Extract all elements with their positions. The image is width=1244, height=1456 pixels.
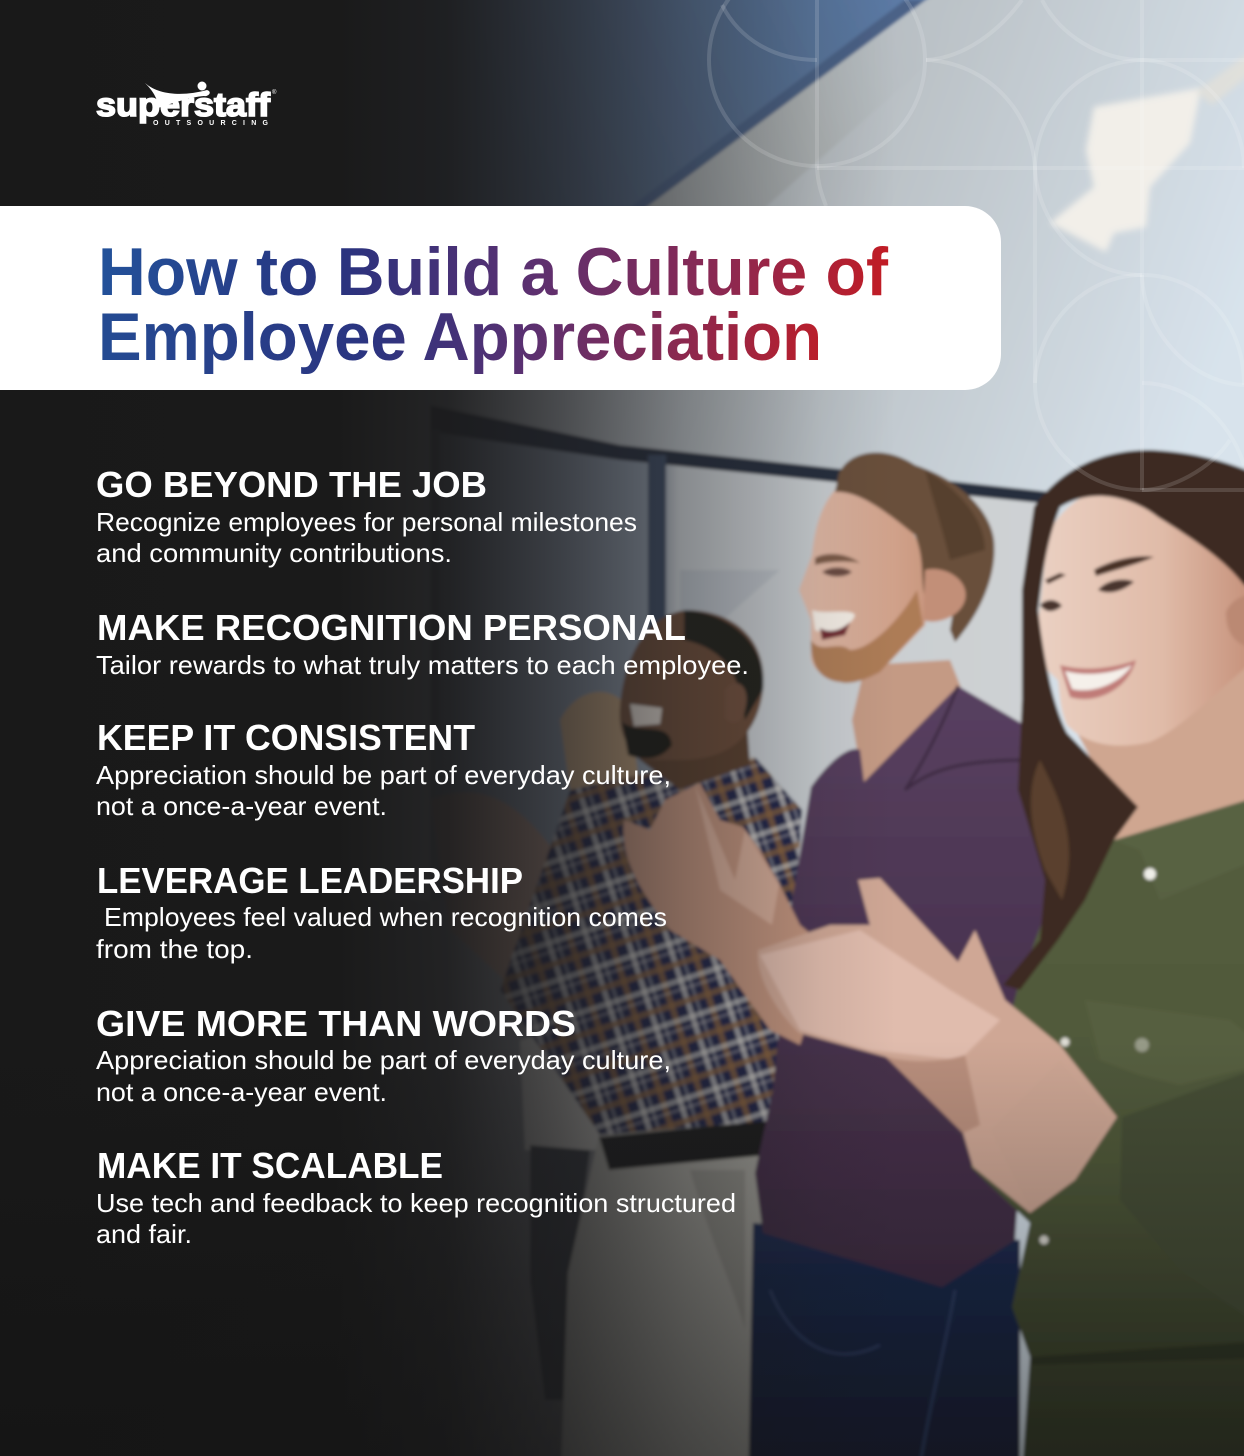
description: Recognize employees for personal milestones (96, 507, 637, 537)
tip: make it scalable (96, 1145, 736, 1249)
colleague in plaid shirt (500, 610, 802, 1456)
heading: KEEP IT CONSISTENT (97, 717, 475, 758)
tip: keep it consistent (96, 717, 671, 821)
tip: leverage leadership (96, 860, 667, 964)
man's clapping hands (623, 783, 830, 1045)
description: Appreciation should be part of everyday culture, (96, 1045, 671, 1075)
description: Employees feel valued when recognition comes (104, 902, 667, 932)
description: Appreciation should be part of everyday culture, (96, 760, 671, 790)
decorative line pattern (709, 0, 1244, 490)
title line 1: How to Build a Culture of (98, 234, 888, 310)
tip: make recognition personal (96, 607, 749, 680)
heading: LEVERAGE LEADERSHIP (97, 860, 523, 901)
description: Use tech and feedback to keep recognition structured (96, 1188, 736, 1218)
description: and fair. (96, 1219, 192, 1249)
description: and community contributions. (96, 538, 452, 568)
description: from the top. (96, 934, 253, 964)
title panel (0, 206, 1001, 390)
title line 2: Employee Appreciation (98, 299, 822, 375)
description: Tailor rewards to what truly matters to each employee. (96, 650, 749, 680)
tip: go beyond the job (96, 464, 637, 568)
blurred colleague in the background (430, 692, 640, 1400)
office window and frame (0, 405, 1050, 1456)
heading: MAKE RECOGNITION PERSONAL (97, 607, 686, 648)
heading: GIVE MORE THAN WORDS (96, 1003, 576, 1044)
description: not a once-a-year event. (96, 791, 387, 821)
logo tagline: OUTSOURCING (153, 120, 269, 127)
woman in green shirt (971, 450, 1244, 1456)
logo: SuperStaff Outsourcing (96, 82, 277, 127)
description: not a once-a-year event. (96, 1077, 387, 1107)
logo registered mark: ® (272, 89, 277, 96)
man in purple shirt (748, 453, 1060, 1456)
woman's clapping hands (758, 878, 1117, 1213)
tip: give more than words (96, 1003, 671, 1107)
logo wordmark: superstaff (96, 86, 271, 123)
heading: GO BEYOND THE JOB (96, 464, 487, 505)
logo swoosh and dot (145, 82, 210, 108)
heading: MAKE IT SCALABLE (97, 1145, 443, 1186)
